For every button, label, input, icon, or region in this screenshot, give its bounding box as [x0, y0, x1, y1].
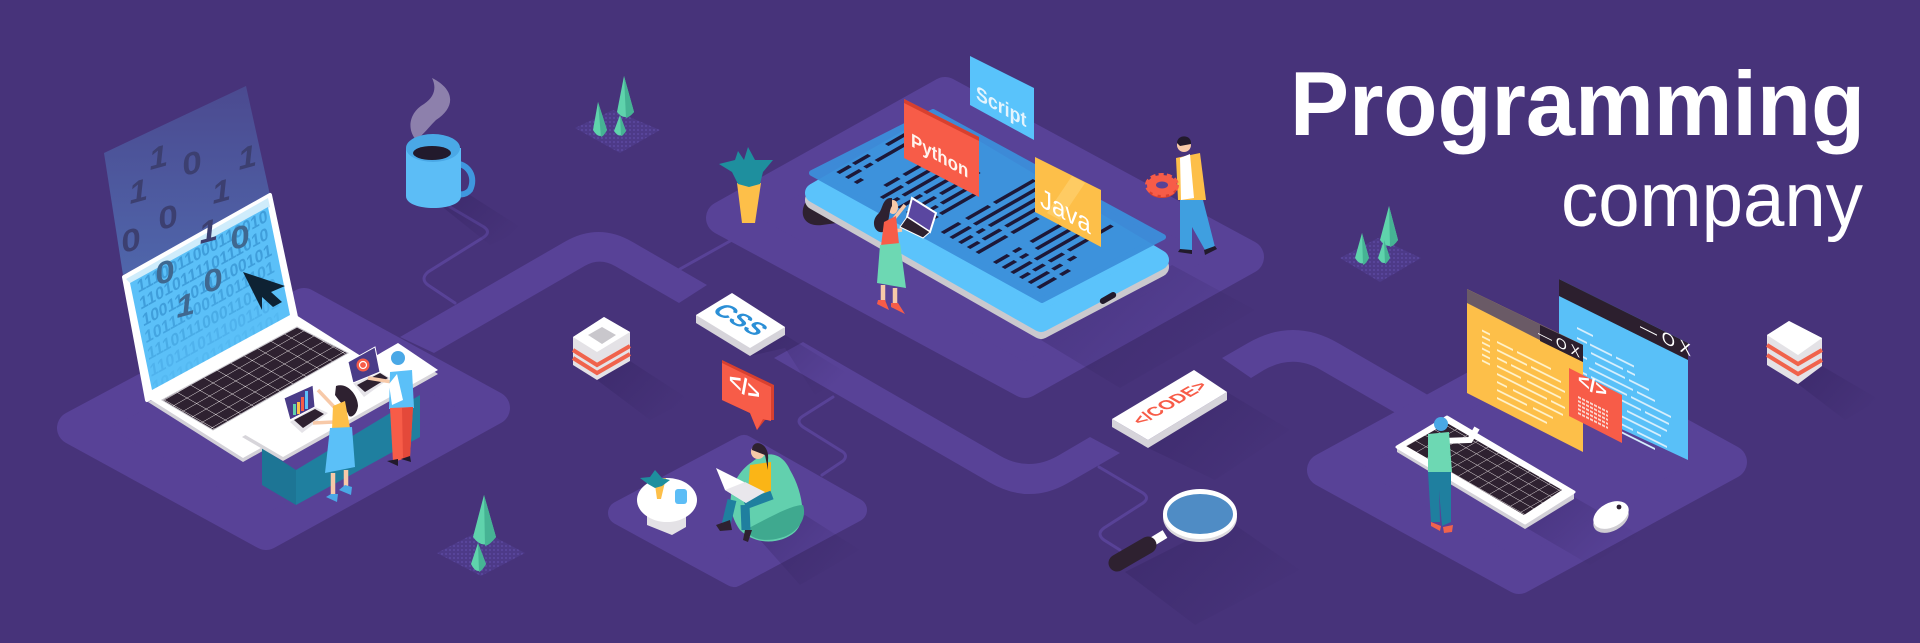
- laptop keyboard: [162, 327, 348, 430]
- code card: </CODE>: [1127, 379, 1212, 427]
- speech bubble code tag: </>: [729, 365, 760, 409]
- trees top centre: [575, 76, 660, 153]
- large laptop: [122, 192, 360, 462]
- woman on bean bag: [716, 443, 860, 585]
- red code tag card: </>: [1578, 368, 1607, 404]
- floating digits over screen: 0: [227, 219, 253, 257]
- css card: [696, 293, 850, 395]
- binary code on screen: 1110111000110110: [146, 274, 277, 364]
- binary code on screen: 1110011000110010: [136, 206, 269, 297]
- title: [1290, 54, 1865, 243]
- code card: [1112, 370, 1290, 480]
- desk with two people: [242, 343, 438, 505]
- platform: mobile code: [723, 94, 1247, 381]
- stacked cube right: [1767, 321, 1880, 420]
- platform: binary laptop: [74, 305, 493, 533]
- floating digits over screen: 0: [200, 262, 226, 300]
- title: company: [1561, 157, 1863, 243]
- stacked cube left: [573, 317, 690, 420]
- holographic binary panel: 0: [118, 222, 144, 260]
- floating digits over screen: 0: [152, 254, 178, 292]
- potted plant: [719, 147, 773, 223]
- small laptop with chart: [284, 385, 328, 433]
- trees right: [1340, 206, 1421, 282]
- platform: bean bag: [620, 447, 855, 575]
- script card: Script: [976, 82, 1027, 132]
- mouse cursor: [243, 272, 285, 310]
- floating digits over screen: 1: [197, 212, 219, 251]
- woman with laptop: [874, 198, 936, 314]
- side table with plant and mug: [637, 470, 697, 535]
- man in red trousers: [368, 351, 414, 466]
- holographic binary panel: 0: [179, 145, 205, 183]
- red code tag card: [1569, 368, 1622, 443]
- binary code on screen: 1101011110111010: [138, 224, 270, 314]
- holographic binary panel: 1: [127, 172, 149, 211]
- java card: Java: [1040, 181, 1091, 241]
- floating digits over screen: 1: [174, 286, 196, 325]
- binary code on screen: 1001110111100101: [141, 240, 273, 331]
- computer keyboard: [1397, 417, 1640, 565]
- blue code window: — O X: [1640, 316, 1691, 360]
- blue code window: [1559, 279, 1691, 465]
- binary code on screen: [138, 210, 278, 388]
- trees bottom left: [437, 495, 525, 576]
- thin connector lines: [424, 207, 1146, 550]
- yellow code window: — O X: [1538, 326, 1580, 362]
- isometric programming company infographic: [57, 56, 1863, 594]
- person at keyboard: [1428, 417, 1477, 533]
- holographic binary panel: 0: [155, 199, 181, 237]
- binary code on screen: 1011010111011101: [151, 307, 284, 398]
- css card: CSS: [705, 300, 774, 340]
- floating digits over screen: [152, 212, 253, 325]
- computer mouse: [1589, 495, 1633, 539]
- connector paths: [400, 232, 1440, 494]
- title: Programming: [1290, 54, 1865, 155]
- man with gear: [1147, 136, 1217, 255]
- small laptop with target: [348, 347, 390, 397]
- magnifying glass: [1117, 489, 1300, 625]
- holographic binary panel: 1: [147, 138, 169, 177]
- binary code on screen: 1101110111001101: [149, 291, 280, 381]
- woman in blue skirt: [313, 385, 358, 502]
- python card: [904, 99, 979, 197]
- code lines: [838, 120, 1130, 288]
- speech bubble code tag: [722, 360, 774, 430]
- script card: [970, 56, 1034, 140]
- holographic binary panel: 1: [236, 138, 258, 177]
- platform: keyboard and windows: [1324, 355, 1730, 577]
- binary code on screen: 1011100011011101: [143, 257, 276, 347]
- holographic binary panel: 1: [210, 172, 232, 211]
- python card: Python: [911, 130, 968, 183]
- tablet phone with code: [803, 112, 1255, 388]
- holographic binary panel: [104, 86, 270, 275]
- coffee mug: [406, 78, 525, 245]
- yellow code window: [1467, 289, 1583, 452]
- java card: [1035, 157, 1101, 247]
